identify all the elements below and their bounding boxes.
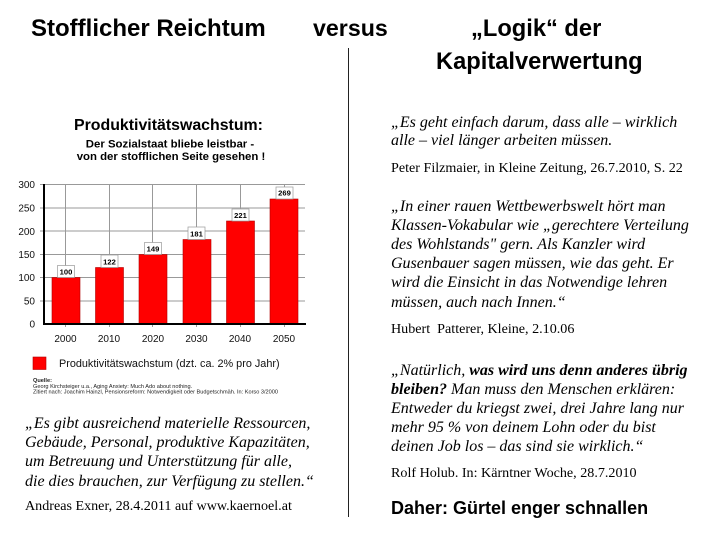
bar chart: 300 — [18, 180, 35, 191]
chart heading: Der Sozialstaat bliebe leistbar - — [86, 138, 254, 150]
bar chart: 100 — [18, 273, 35, 284]
quote: Holub: bleiben? Man muss den Menschen erklären: — [391, 381, 675, 398]
quote: Patterer: des Wohlstands" gern. Als Kanzler wird — [391, 236, 645, 253]
source: Patterer: Hubert Patterer, Kleine, 2.10.06 — [391, 321, 574, 337]
title: Logik der Kapitalverwertung — [436, 16, 643, 75]
chart heading: Produktivitätswachstum: — [74, 117, 263, 134]
source: Filzmaier: Peter Filzmaier, in Kleine Zeitung, 26.7.2010, S. 22 — [391, 160, 683, 176]
bar chart: 150 — [18, 250, 35, 261]
quote: Filzmaier: alle – viel länger arbeiten müssen. — [391, 132, 612, 149]
bar chart: 200 — [18, 227, 35, 238]
quote: Patterer: Klassen-Vokabular wie „gerechtere Verteilung — [391, 217, 689, 234]
bar chart: 250 — [18, 204, 35, 214]
bar chart — [18, 180, 306, 345]
bar chart: 2010 — [98, 334, 121, 345]
bar chart: 181 — [190, 230, 204, 238]
source: Holub: Rolf Holub. In: Kärntner Woche, 28.7.2010 — [391, 465, 637, 481]
bar chart: 50 — [24, 296, 35, 308]
title: versus: versus — [313, 15, 388, 41]
bar chart: 100 — [60, 268, 72, 276]
bar chart: 2020 — [142, 334, 165, 345]
quote: Patterer — [390, 198, 689, 311]
quote: Patterer: Gusenbauer sagen müssen, wie das geht. Er — [391, 255, 674, 272]
title: Stofflicher Reichtum: Stofflicher Reichtum — [31, 15, 266, 42]
quote: Holub: Entweder du kriegst zwei, drei Jahre lang nur — [391, 400, 684, 417]
quote: Filzmaier: „Es geht einfach darum, dass alle – wirklich — [391, 114, 677, 130]
bar chart: 0 — [29, 320, 35, 330]
quote: Holub: mehr 95 % von deinem Lohn oder du bist — [391, 419, 656, 436]
bar chart: 269 — [278, 188, 291, 198]
bar chart: 2050 — [273, 334, 296, 345]
quote: Filzmaier — [391, 114, 677, 149]
chart source note: Georg Kirchsteiger u.a., Aging Anxiety: Much Ado about nothing. — [33, 384, 193, 390]
title: Logik der Kapitalverwertung: „Logik“ der — [471, 16, 601, 42]
quote: Holub — [390, 362, 688, 455]
conclusion: Gürtel enger schnallen: Daher: Gürtel enger schnallen — [391, 498, 648, 518]
quote: Patterer: „In einer rauen Wettbewerbswelt hört man — [391, 198, 666, 215]
chart source note: Quelle: — [33, 378, 52, 384]
quote: Exner: die dies brauchen, zur Verfügung zu stellen.“ — [25, 473, 314, 490]
quote: Exner: um Betreuung und Unterstützung für alle, — [25, 453, 292, 470]
source: Exner: Andreas Exner, 28.4.2011 auf www.kaernoel.at — [25, 498, 292, 514]
chart source note: Zitiert nach: Joachim Hainzl, Pensionsreform: Notwendigkeit oder Budgetschmäh. In: Korso 3/2000 — [33, 390, 278, 396]
bar chart: 2040 — [229, 334, 252, 345]
quote: Patterer: wird die Einsicht in das Notwendige lehren — [391, 274, 667, 291]
quote: Holub: „Natürlich, was wird uns denn anderes übrig — [391, 362, 688, 379]
bar chart: 122 — [103, 258, 116, 266]
panel: productivity chart — [18, 117, 306, 396]
bar chart: 221 — [234, 211, 248, 220]
chart heading — [74, 117, 265, 163]
bar chart: 2030 — [185, 334, 208, 345]
quote: Exner — [25, 415, 314, 490]
chart legend: Produktivitätswachstum (dzt. ca. 2% pro Jahr) — [59, 358, 280, 370]
quote: Patterer: müssen, auch nach Innen.“ — [391, 294, 566, 311]
quote: Exner: Gebäude, Personal, produktive Kapazitäten, — [25, 434, 310, 451]
title: Logik der Kapitalverwertung: Kapitalverwertung — [436, 49, 643, 75]
chart heading: von der stofflichen Seite gesehen ! — [77, 151, 265, 163]
bar chart: 149 — [147, 244, 159, 254]
chart source note — [33, 378, 278, 396]
bar chart: 2000 — [54, 334, 77, 345]
quote: Exner: „Es gibt ausreichend materielle Ressourcen, — [25, 415, 310, 432]
quote: Holub: deinen Job los – das sind sie wirklich.“ — [391, 438, 643, 455]
center divider line — [348, 48, 349, 517]
